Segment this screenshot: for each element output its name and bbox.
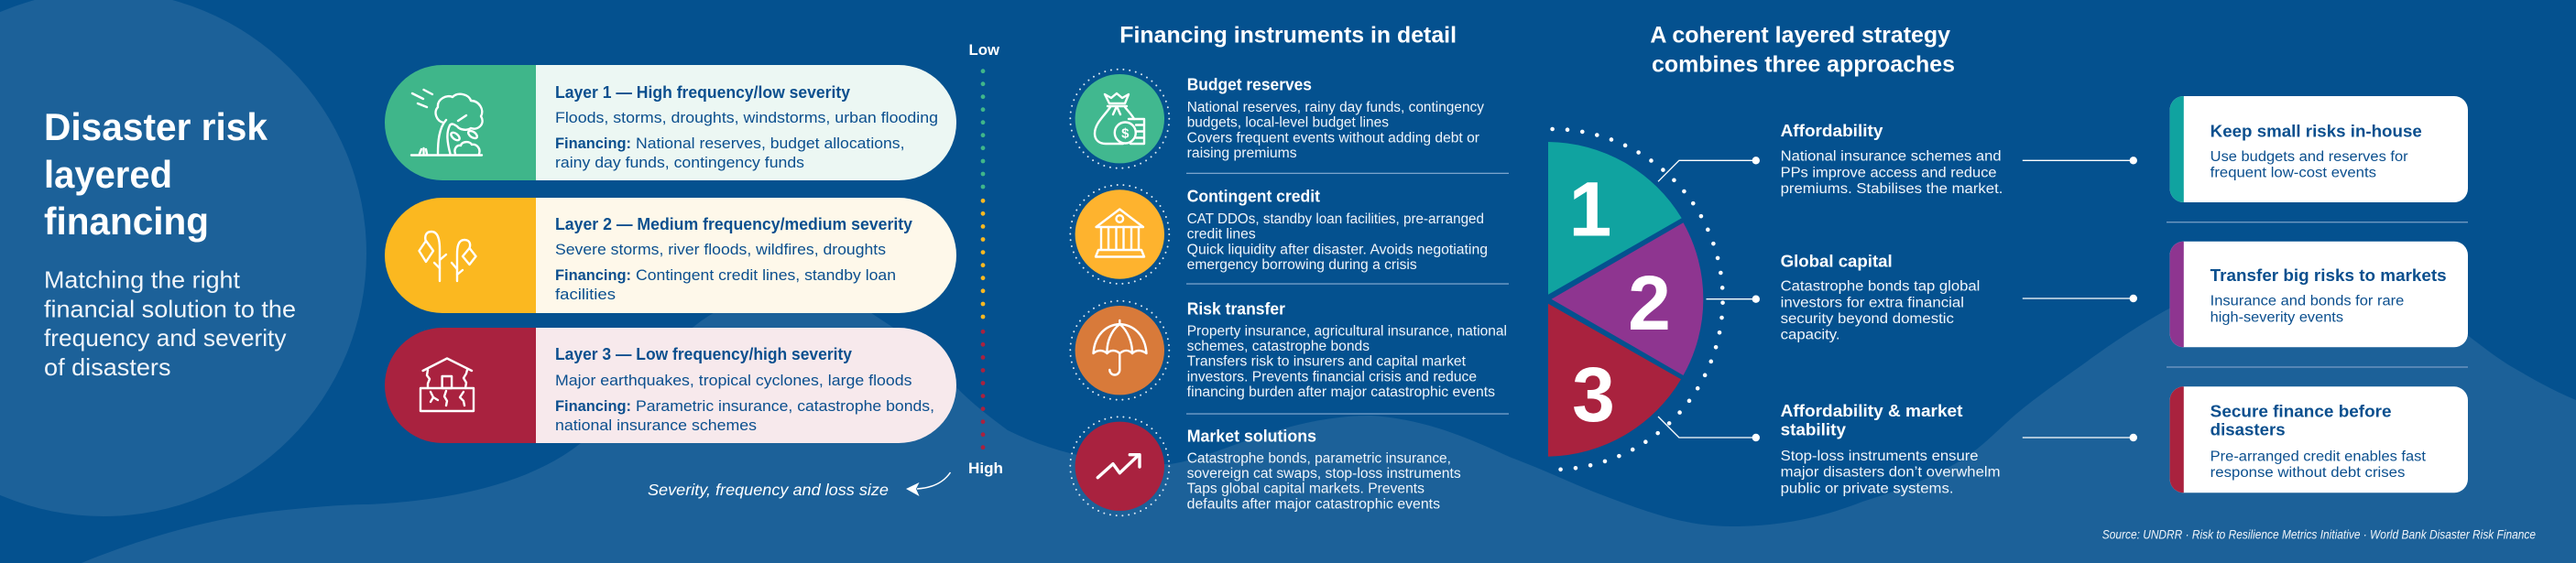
icon: rising chart arrow xyxy=(1097,455,1140,478)
connector: segment 1 xyxy=(1658,157,1760,181)
connector: to card 3 xyxy=(2023,434,2137,441)
text block: affordability and market stability: stability xyxy=(1781,421,1846,439)
segment 1: 1 xyxy=(1569,166,1611,252)
card 3 text: disasters xyxy=(2210,421,2286,439)
card 3 text: Secure finance before xyxy=(2210,402,2392,420)
card 3 text xyxy=(2210,402,2427,481)
text block: global capital: Global capital xyxy=(1781,253,1893,271)
layer 1 text: Floods, storms, droughts, windstorms, urban flooding xyxy=(555,109,938,126)
card 2 text: Insurance and bonds for rare xyxy=(2210,294,2404,309)
text block: affordability and market stability: Affordability & market xyxy=(1781,402,1962,420)
contingent credit text: emergency borrowing during a crisis xyxy=(1187,257,1417,273)
layer 2 text: facilities xyxy=(555,286,616,303)
icon: wilting plants xyxy=(420,232,476,281)
text block: global capital: capacity. xyxy=(1781,328,1840,343)
contingent credit text: Quick liquidity after disaster. Avoids negotiating xyxy=(1187,242,1488,257)
contingent credit text: CAT DDOs, standby loan facilities, pre-arranged xyxy=(1187,211,1484,227)
budget reserves text: Budget reserves xyxy=(1187,76,1312,94)
budget reserves text: Covers frequent events without adding debt or xyxy=(1187,130,1479,146)
text block: affordability xyxy=(1781,122,2003,197)
contingent credit text xyxy=(1187,188,1488,273)
layer 2 text: Severe storms, river floods, wildfires, droughts xyxy=(555,241,886,258)
title: Disaster risk xyxy=(44,105,268,148)
layer 1 text: Layer 1 — High frequency/low severity xyxy=(555,83,850,102)
layer 2 text: Layer 2 — Medium frequency/medium severity xyxy=(555,215,912,233)
layer 3 text: Financing: xyxy=(555,397,631,415)
text block: global capital xyxy=(1781,253,1980,343)
severity scale xyxy=(968,41,1003,477)
card: keep small risks in-house xyxy=(2170,96,2468,202)
text block: global capital: investors for extra financial xyxy=(1781,295,1964,310)
segment 2 xyxy=(1552,222,1703,375)
text block: affordability and market stability: Stop-loss instruments ensure xyxy=(1781,449,1979,464)
label: low: Low xyxy=(969,41,1000,59)
risk transfer text: Risk transfer xyxy=(1187,299,1285,318)
card: transfer big risks to markets xyxy=(2170,242,2468,347)
contingent credit text: credit lines xyxy=(1187,227,1256,243)
layer 3 text: Parametric insurance, catastrophe bonds, xyxy=(636,397,934,415)
icon: cracked house xyxy=(420,359,474,411)
subtitle: of disasters xyxy=(44,353,170,381)
title xyxy=(44,105,268,243)
severity caption: Severity, frequency and loss size xyxy=(648,481,889,499)
text block: global capital: Catastrophe bonds tap global xyxy=(1781,279,1980,295)
icon: money bag xyxy=(1095,93,1144,144)
contingent credit text: Contingent credit xyxy=(1187,188,1320,206)
layer 2 text: Financing: xyxy=(555,266,631,284)
budget reserves text: budgets, local-level budget lines xyxy=(1187,115,1389,131)
text block: affordability and market stability xyxy=(1781,402,2001,496)
icon: money bag: $ xyxy=(1121,126,1130,141)
layer 1 text xyxy=(555,83,938,171)
card 2 text: Transfer big risks to markets xyxy=(2210,266,2447,285)
market solutions text: sovereign cat swaps, stop-loss instruments xyxy=(1187,466,1461,482)
subtitle: financial solution to the xyxy=(44,295,296,322)
card 1 text: frequent low-cost events xyxy=(2210,165,2376,180)
market solutions text: Catastrophe bonds, parametric insurance, xyxy=(1187,450,1451,466)
heading: financing instruments: Financing instruments in detail xyxy=(1119,23,1457,49)
market solutions text: defaults after major catastrophic events xyxy=(1187,496,1440,512)
text block: affordability and market stability: public or private systems. xyxy=(1781,481,1953,496)
layer 3 text: Layer 3 — Low frequency/high severity xyxy=(555,345,852,363)
text block: affordability: Affordability xyxy=(1781,122,1883,140)
layer 1 text: rainy day funds, contingency funds xyxy=(555,154,804,171)
market solutions text: Market solutions xyxy=(1187,427,1316,445)
risk transfer text: investors. Prevents financial crisis and reduce xyxy=(1187,369,1477,384)
card 1 text: Keep small risks in-house xyxy=(2210,122,2422,140)
icon: umbrella xyxy=(1094,320,1147,375)
heading: coherent strategy xyxy=(1650,23,1955,77)
layer 3 text: Major earthquakes, tropical cyclones, large floods xyxy=(555,372,912,389)
title: financing xyxy=(44,200,209,243)
label: high: High xyxy=(968,460,1003,477)
budget reserves text xyxy=(1187,76,1484,161)
text block: affordability: National insurance schemes and xyxy=(1781,149,2002,165)
panel: layer 1 xyxy=(385,65,956,180)
card 2 text xyxy=(2210,266,2447,326)
title block xyxy=(44,105,296,381)
segment 1 xyxy=(1548,142,1682,295)
layer 1 text: National reserves, budget allocations, xyxy=(636,135,905,152)
segment 2: 2 xyxy=(1628,260,1671,346)
connector: segment 3 xyxy=(1658,417,1760,441)
layer 1 text: Financing: xyxy=(555,135,631,152)
instrument: contingent credit xyxy=(1070,185,1488,284)
chart: layered half pie xyxy=(1548,129,1723,470)
risk transfer text: financing burden after major catastrophic events xyxy=(1187,384,1495,400)
heading: coherent strategy: combines three approaches xyxy=(1652,51,1955,77)
card 1 text xyxy=(2210,122,2422,180)
budget reserves text: raising premiums xyxy=(1187,146,1297,161)
subtitle: frequency and severity xyxy=(44,324,286,352)
text block: global capital: security beyond domestic xyxy=(1781,311,1954,327)
layer 2 text xyxy=(555,215,912,303)
risk transfer text: Transfers risk to insurers and capital market xyxy=(1187,354,1467,370)
market solutions text: Taps global capital markets. Prevents xyxy=(1187,482,1424,497)
icon: tree in storm xyxy=(411,90,483,156)
layer 3 text xyxy=(555,345,934,434)
text block: affordability: PPs improve access and reduce xyxy=(1781,165,1997,180)
card 1 text: Use budgets and reserves for xyxy=(2210,149,2408,165)
panel: layer 2 xyxy=(385,198,956,313)
subtitle: Matching the right xyxy=(44,265,241,293)
layer 2 text: Contingent credit lines, standby loan xyxy=(636,266,896,284)
icon: bank xyxy=(1096,209,1144,256)
instrument: market solutions xyxy=(1070,417,1461,515)
card 3 text: response without debt crises xyxy=(2210,465,2406,481)
instrument: budget reserves xyxy=(1070,70,1484,168)
arrow: severity caption xyxy=(906,472,951,496)
layer 3 text: national insurance schemes xyxy=(555,417,757,434)
market solutions text xyxy=(1187,427,1461,512)
panel: layer 3 xyxy=(385,328,956,443)
segment 3: 3 xyxy=(1572,352,1615,438)
card 2 text: high-severity events xyxy=(2210,310,2343,326)
text block: affordability and market stability: major disasters don’t overwhelm xyxy=(1781,465,2001,481)
subtitle xyxy=(44,265,296,381)
connector: segment 2 xyxy=(1706,295,1760,303)
risk transfer text xyxy=(1187,299,1507,400)
connector: to card 2 xyxy=(2023,295,2137,302)
segment 3 xyxy=(1548,304,1681,457)
risk transfer text: schemes, catastrophe bonds xyxy=(1187,339,1370,354)
card 3 text: Pre-arranged credit enables fast xyxy=(2210,449,2427,464)
budget reserves text: National reserves, rainy day funds, contingency xyxy=(1187,100,1484,115)
instrument: risk transfer xyxy=(1070,299,1507,400)
title: layered xyxy=(44,153,172,196)
text block: affordability: premiums. Stabilises the market. xyxy=(1781,181,2003,197)
card: secure finance before disasters xyxy=(2170,386,2468,493)
risk transfer text: Property insurance, agricultural insurance, national xyxy=(1187,323,1507,339)
heading: coherent strategy: A coherent layered strategy xyxy=(1650,23,1950,49)
connector: to card 1 xyxy=(2023,157,2137,165)
